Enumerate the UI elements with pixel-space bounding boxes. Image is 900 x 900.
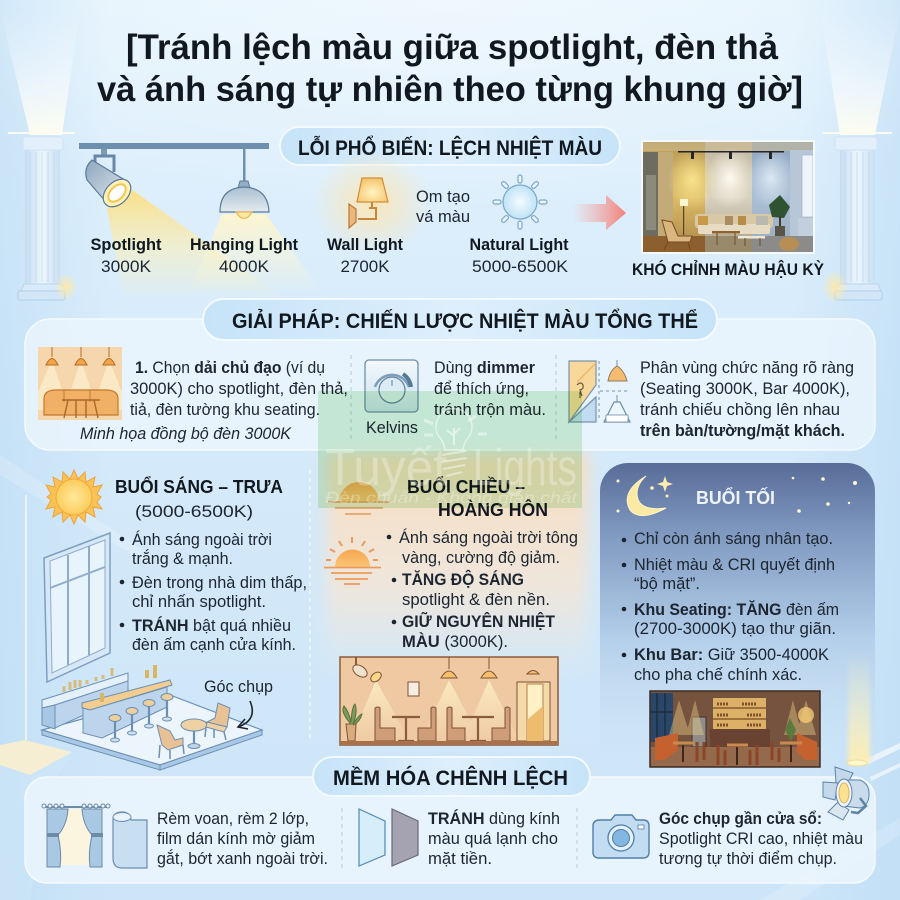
text: curtains: film dán kính mờ giảm <box>157 830 315 848</box>
watermark: Lights <box>473 439 577 497</box>
label: hanging light: Hanging Light <box>190 236 298 254</box>
label: spotlight <box>90 236 162 276</box>
callout: camera angle: Góc chụp <box>204 678 273 696</box>
icon: spotlight <box>86 149 283 297</box>
illustration: night restaurant <box>650 691 820 767</box>
icon: moon and stars <box>616 476 673 516</box>
bullets: evening: Khu Seating: TĂNG đèn ấm <box>634 600 839 619</box>
text: step 1: tiả, đèn tường khu seating. <box>130 401 320 419</box>
heading: afternoon: HOÀNG HÔN <box>438 499 548 520</box>
text: photo angle: Góc chụp gần cửa sổ: <box>659 810 822 828</box>
bullets: morning: đèn ấm cạnh cửa kính. <box>132 636 296 654</box>
icon: wall light <box>312 151 432 255</box>
heading pill: solution: GIẢI PHÁP: CHIẾN LƯỢC NHIỆT MÀU TỔNG THỂ <box>232 309 698 333</box>
label: natural light <box>470 236 569 276</box>
bullets: evening: Chỉ còn ánh sáng nhân tạo. <box>634 530 833 548</box>
icon: glass panes <box>359 809 418 866</box>
bullets: afternoon: MÀU (3000K). <box>402 632 508 651</box>
text: dimmer: để thích ứng, <box>434 380 529 398</box>
callout: camera angle <box>204 678 273 729</box>
text: photo angle: tương tự thời điểm chụp. <box>659 850 837 868</box>
note: patch colors <box>416 188 470 226</box>
label: wall light <box>327 236 403 276</box>
beam: floor light <box>847 650 870 766</box>
bullets: afternoon: spotlight & đèn nền. <box>402 591 550 609</box>
panel: solution <box>25 319 875 450</box>
text: avoid cold glass: TRÁNH dùng kính <box>428 809 560 828</box>
icon: sofa with three lamps <box>38 347 122 420</box>
label: hanging light: 4000K <box>219 258 269 276</box>
bullets: evening: “bộ mặt”. <box>634 575 700 593</box>
icon: natural light <box>493 175 547 229</box>
text: zoning: tránh chiếu chồng lên nhau <box>640 401 840 419</box>
heading pill: common error: LỖI PHỔ BIẾN: LỆCH NHIỆT MÀU <box>298 136 602 160</box>
icon: stage light <box>823 767 869 820</box>
title: [Tránh lệch màu giữa spotlight, đèn thả <box>126 28 779 67</box>
bullets: afternoon: TĂNG ĐỘ SÁNG <box>402 570 524 589</box>
icon: window film roll <box>113 812 147 868</box>
section: morning <box>42 470 307 770</box>
icon: track rail <box>79 143 269 149</box>
icon: zoned lighting <box>569 360 630 422</box>
text: avoid cold glass <box>428 809 560 868</box>
panel: soften difference <box>25 777 875 883</box>
arrow <box>572 195 626 230</box>
heading pill: common error <box>280 127 620 165</box>
bullets: afternoon <box>387 528 578 651</box>
text: zoning <box>640 359 854 440</box>
bullets: morning <box>120 530 307 654</box>
bullets: morning: chỉ nhấn spotlight. <box>132 593 266 611</box>
heading: morning: BUỔI SÁNG – TRƯA <box>115 476 283 497</box>
bullets: morning: Ánh sáng ngoài trời <box>132 530 272 549</box>
text: curtains: gắt, bớt xanh ngoài trời. <box>157 849 328 868</box>
label: natural light: Natural Light <box>470 236 569 254</box>
text: step 1: 1. Chọn dải chủ đạo (ví dụ <box>135 359 325 377</box>
icon: curtains <box>42 804 110 867</box>
bullets: morning: Đèn trong nhà dim thấp, <box>132 574 307 592</box>
label: natural light: 5000-6500K <box>472 258 568 276</box>
label: spotlight: 3000K <box>101 258 151 276</box>
photo: mixed colour room <box>641 140 815 254</box>
bullets: evening: cho pha chế chính xác. <box>634 666 802 684</box>
label: hanging light <box>190 236 298 276</box>
heading: afternoon <box>407 476 548 520</box>
heading: morning <box>115 476 283 521</box>
watermark: Đèn chuẩn - Không gian chất <box>325 489 578 507</box>
label: wall light: 2700K <box>340 258 390 276</box>
bullets: evening: Khu Bar: Giữ 3500-4000K <box>634 646 829 664</box>
text: zoning: trên bàn/tường/mặt khách. <box>640 422 845 440</box>
bullets: afternoon: GIỮ NGUYÊN NHIỆT <box>402 611 555 631</box>
title <box>97 28 803 109</box>
text: avoid cold glass: mặt tiền. <box>428 850 492 868</box>
text: zoning: (Seating 3000K, Bar 4000K), <box>640 380 850 398</box>
title: và ánh sáng tự nhiên theo từng khung giờ] <box>97 70 803 109</box>
heading: afternoon: BUỔI CHIỀU – <box>407 476 525 497</box>
column: left <box>0 10 80 301</box>
note: patch colors: vá màu <box>416 208 470 226</box>
text: dimmer: Dùng dimmer <box>434 359 536 377</box>
background glow: dusk <box>326 452 588 674</box>
text: step 1: 3000K) cho spotlight, đèn thả, <box>130 380 348 398</box>
bullets: afternoon: vàng, cường độ giảm. <box>402 549 560 567</box>
text: photo angle: Spotlight CRI cao, nhiệt màu <box>659 830 863 848</box>
section: evening <box>600 463 875 783</box>
icon: ghost sunset <box>328 482 390 514</box>
icon: window <box>44 533 110 682</box>
bullets: evening: Nhiệt màu & CRI quyết định <box>634 556 835 574</box>
bullets: afternoon: Ánh sáng ngoài trời tông <box>399 528 578 547</box>
text: zoning: Phân vùng chức năng rõ ràng <box>640 359 854 377</box>
label: wall light: Wall Light <box>327 236 403 254</box>
icon: camera <box>593 815 649 858</box>
text: curtains: Rèm voan, rèm 2 lớp, <box>157 810 309 828</box>
label: spotlight: Spotlight <box>90 236 162 254</box>
stars <box>792 477 857 513</box>
bullets: evening <box>622 530 839 684</box>
illustration: isometric bar <box>42 665 262 770</box>
illustration: warm restaurant <box>340 657 558 745</box>
note: patch colors: Om tạo <box>416 188 470 206</box>
watermark <box>318 391 582 508</box>
icon: sun <box>46 470 102 524</box>
bullets: morning: trắng & mạnh. <box>132 549 233 568</box>
bullets: morning: TRÁNH bật quá nhiều <box>132 616 291 635</box>
heading pill: soften <box>313 757 590 796</box>
bullets: evening: (2700-3000K) tạo thư giãn. <box>634 620 836 638</box>
icon: dimmer <box>365 360 418 437</box>
text: step 1: Minh họa đồng bộ đèn 3000K <box>80 425 292 443</box>
icon: sunset <box>324 537 381 584</box>
icon: hanging light <box>190 149 320 290</box>
section: afternoon <box>324 476 578 745</box>
heading: morning: (5000-6500K) <box>135 503 253 521</box>
text: curtains <box>157 810 328 868</box>
text: avoid cold glass: màu quá lạnh cho <box>428 830 558 848</box>
caption: hard to grade: KHÓ CHỈNH MÀU HẬU KỲ <box>632 260 824 279</box>
text: dimmer <box>434 359 546 419</box>
text: photo angle <box>659 810 863 868</box>
text: step 1 <box>80 359 348 443</box>
heading pill: solution <box>203 299 717 340</box>
heading pill: soften: MỀM HÓA CHÊNH LỆCH <box>333 766 568 790</box>
heading: evening: BUỔI TỐI <box>696 487 775 508</box>
text: dimmer: tránh trộn màu. <box>434 401 546 419</box>
column: right <box>820 10 900 304</box>
icon: dimmer: Kelvins <box>366 419 418 437</box>
watermark: Tuyết <box>325 439 448 497</box>
